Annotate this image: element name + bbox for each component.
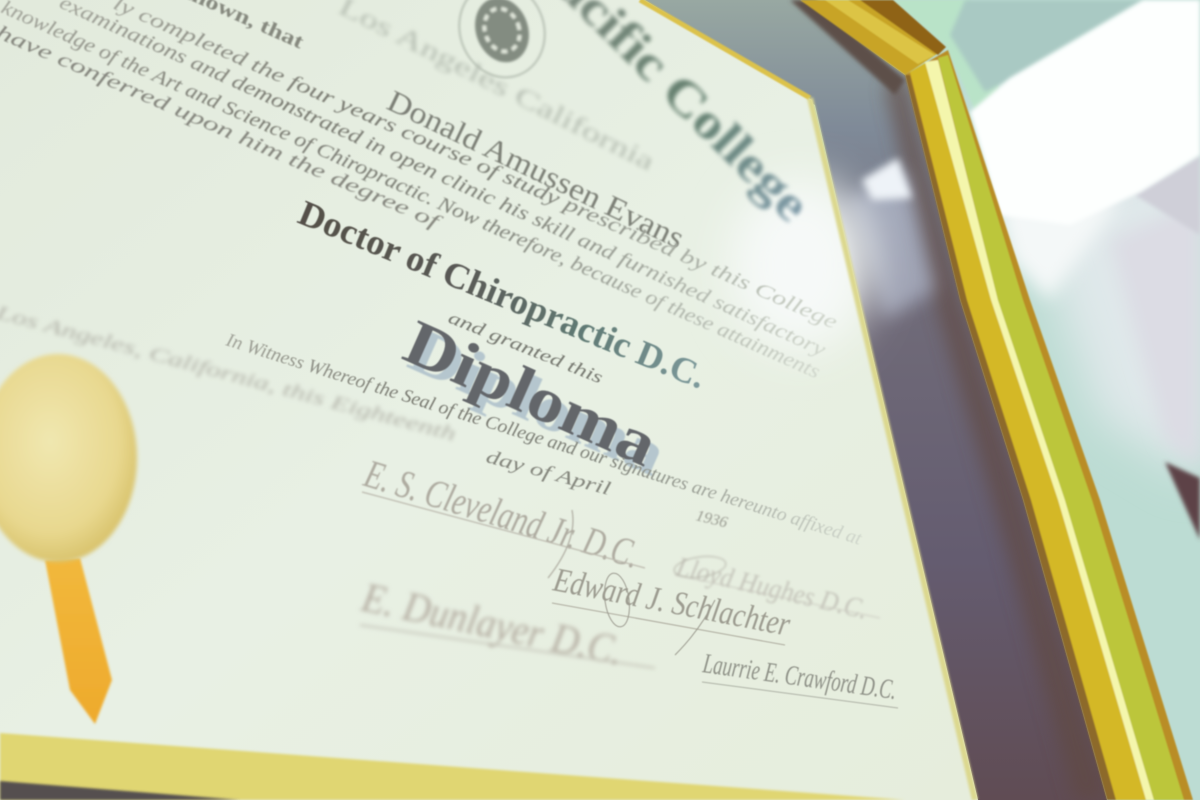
gold frame	[800, 0, 1193, 800]
granted line: and granted this	[446, 307, 606, 388]
gold seal	[0, 354, 137, 562]
signature: president: E. S. Cleveland Jr. D.C.	[359, 450, 645, 577]
body text line 3: knowledge of the Art and Science of Chiropractic. Now therefore, because of these attainments	[0, 0, 824, 384]
college crest	[446, 0, 558, 89]
wooden mat	[645, 0, 1107, 800]
signature: president	[359, 450, 645, 578]
body text line 4: have conferred upon him the degree of	[0, 21, 445, 234]
diploma title: Diploma	[399, 314, 677, 489]
recipient name: Donald Amussen Evans	[382, 83, 690, 255]
year: 1936	[694, 507, 729, 532]
paper highlight	[730, 180, 870, 350]
mat glare spot	[862, 158, 912, 200]
place line: Los Angeles, California, this Eighteenth	[0, 301, 458, 446]
diploma title: Diploma	[394, 306, 668, 480]
signature: lower right: Laurrie E. Crawford D.C.	[700, 648, 898, 706]
mat reflection	[845, 170, 935, 320]
gold inner edge	[640, 0, 975, 800]
signature: lower right	[700, 648, 898, 708]
body text line 2: examinations and demonstrated in open clinic his skill and furnished satisfactory	[56, 0, 829, 361]
ribbon	[45, 558, 112, 724]
bottom gold border	[0, 733, 905, 800]
date line: day of April	[484, 447, 613, 500]
window light glare	[970, 0, 1200, 300]
witness line: In Witness Whereof the Seal of the College and our signatures are hereunto affixed at	[223, 329, 865, 550]
signature: lower left: E. Dunlayer D.C.	[357, 575, 627, 675]
bottom dark edge	[0, 781, 240, 800]
signature: centre: Edward J. Schlachter	[550, 561, 794, 644]
signature: upper right: Lloyd Hughes D.C.	[673, 551, 870, 626]
degree title: Doctor of Chiropractic D.C.	[293, 192, 712, 397]
